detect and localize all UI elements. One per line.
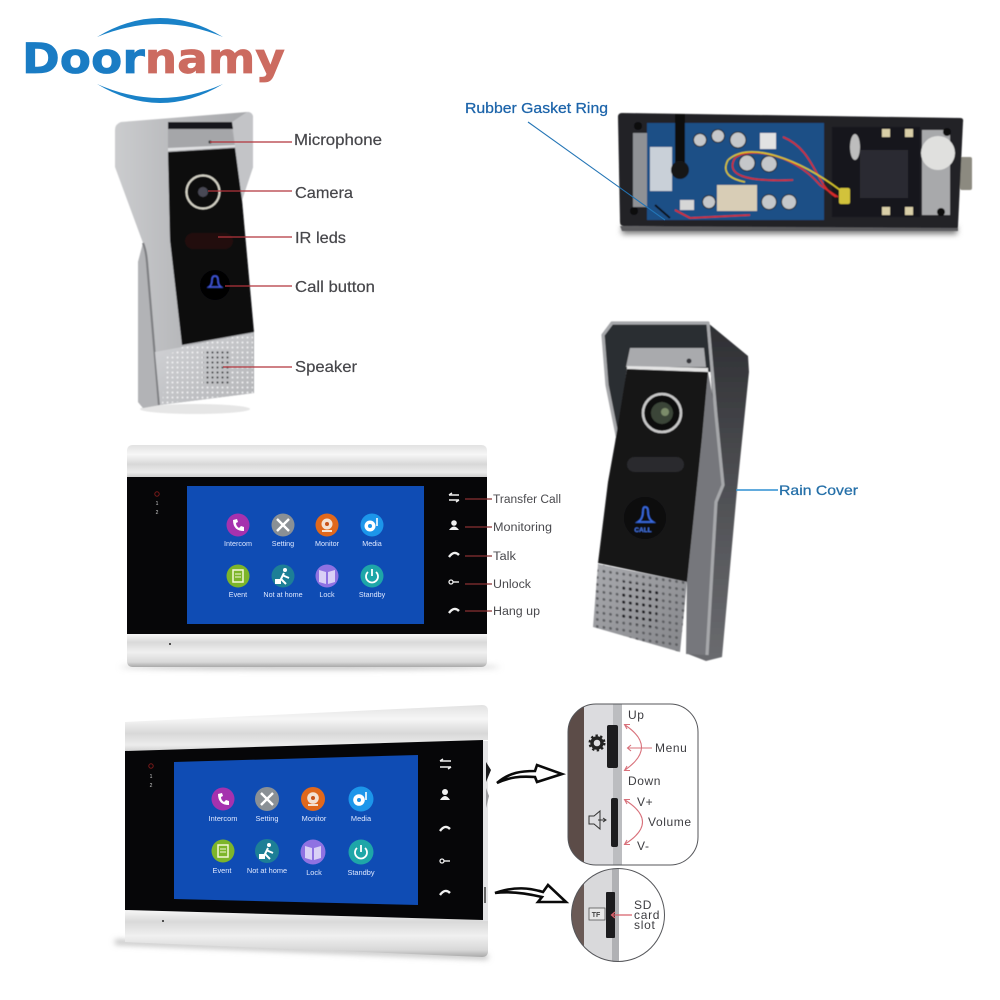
monitor 2 screen [174,755,418,905]
side icon: transfer [440,759,451,769]
callout: Camera: Camera [295,185,353,202]
logo wordmark: Doornamy [22,34,285,83]
button: Unlock: Unlock [493,579,531,591]
panel: side controls close-up [568,704,698,865]
app icon: Standby: Standby [347,868,375,877]
side icon: hang up [440,891,450,895]
logo bottom arc [97,84,223,103]
app icon: Standby [347,840,375,877]
label: Menu: Menu [655,741,687,755]
button: Transfer Call [449,493,561,506]
monitor 1 body: 2 [156,510,159,516]
logo top arc [97,18,223,37]
product: doorbell with rain cover [593,323,858,661]
arrow: to side controls [497,765,562,783]
side icon: monitoring [440,789,450,800]
callout: Call button: Call button [295,279,375,296]
label: SD card slot: card [634,908,660,922]
callout: Microphone: Microphone [294,132,382,149]
rain cover doorbell photo: CALL [634,527,652,534]
app icon: Lock: Lock [319,590,335,599]
circle outline [572,868,664,962]
callout: Rain Cover [736,482,858,498]
app icon: Event [226,564,250,599]
app icon: Monitor [315,514,340,548]
app icon: Lock [316,564,338,599]
label: V+: V+ [637,795,653,809]
app icon: Lock: Lock [306,868,322,877]
panel outline [568,704,698,865]
callout: IR leds: IR leds [295,230,346,247]
monitor 2 body: 2 [150,783,153,789]
side photo [568,704,622,865]
label: SD card slot: SD [634,898,652,912]
app icon: Intercom [224,514,252,548]
app icon: Media: Media [362,539,382,548]
app icon: Not at home [263,564,303,599]
app icon: Intercom: Intercom [224,539,252,548]
app icon: Not at home: Not at home [247,866,287,875]
product: doorbell PCB with rubber gasket ring [465,101,972,234]
label: Down: Down [628,774,661,788]
app icon: Setting [272,514,294,548]
icon: gear [590,736,604,750]
button: Talk: Talk [493,551,516,563]
button: Monitoring: Monitoring [493,522,552,534]
label: SD card slot: slot [634,918,655,932]
app icon: Event: Event [229,590,247,599]
side photo [571,868,619,962]
icon: speaker volume [589,811,606,829]
label: V-: V- [637,839,650,853]
volume arc arrows [624,800,642,844]
monitor 1 body [120,445,500,670]
label: Up: Up [628,708,645,722]
app icon: Event: Event [213,866,231,875]
app icon: Media [348,786,374,823]
side icon: talk [440,827,450,831]
app icon: Media: Media [351,814,372,823]
product: indoor monitor front view [120,445,561,670]
app icon: Setting [255,787,279,823]
app icon: Monitor: Monitor [315,539,340,548]
product: doorbell front view with callouts [115,112,382,414]
label: Volume: Volume [648,815,692,829]
button: Hang up [449,606,540,618]
button: Talk [449,551,516,563]
leader line to gasket [528,122,665,220]
button: Unlock [449,579,531,591]
button: Hang up: Hang up [493,606,540,618]
app icon: Intercom [209,788,237,823]
app icon: Event [212,840,234,875]
rain cover doorbell photo [593,323,749,661]
heading: Rubber Gasket Ring: Rubber Gasket Ring [465,101,608,117]
button: Monitoring [449,520,552,534]
app icon: Setting: Setting [272,539,294,548]
arrow: to SD card slot [495,885,566,902]
menu arc arrows [624,724,652,770]
product: indoor monitor angled view [115,705,491,957]
app icon: Standby [359,564,386,599]
monitor 2 body [115,705,491,957]
callout: IR leds [218,230,346,247]
logo: Doornamy [22,18,285,103]
monitor 1 body: 1 [156,501,159,507]
monitor 1 screen [187,486,424,624]
doorbell body [115,112,254,414]
app icon: Lock [300,840,326,877]
PCB enclosure photo [618,113,972,234]
app icon: Not at home [247,839,287,875]
app icon: Intercom: Intercom [209,814,237,823]
icon: TF card: TF [592,912,601,919]
callout: Speaker [223,359,358,376]
app icon: Monitor: Monitor [302,814,327,823]
callout: Speaker: Speaker [295,359,358,376]
arrow to slot [612,912,632,918]
app icon: Not at home: Not at home [263,590,303,599]
button: Transfer Call: Transfer Call [493,494,561,506]
app icon: Media [360,514,384,548]
callout: Rain Cover: Rain Cover [779,482,858,498]
side icon: unlock [440,859,450,863]
monitor 2 body: 1 [150,774,153,780]
app icon: Standby: Standby [359,590,386,599]
panel: SD card slot close-up [571,868,664,962]
app icon: Setting: Setting [255,814,279,823]
app icon: Monitor [301,787,327,823]
